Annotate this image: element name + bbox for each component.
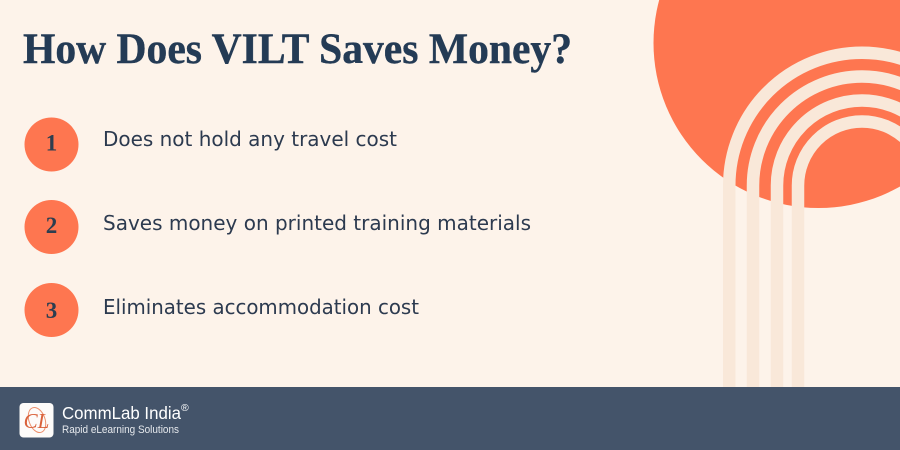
icon: CommLab logo: CL: [24, 409, 49, 433]
decorative sun and arches: [654, 0, 900, 387]
concentric arches: [729, 53, 900, 387]
footer bar: [0, 387, 900, 450]
tagline: Rapid eLearning Solutions: [62, 424, 179, 436]
number badge 1: [24, 118, 78, 172]
brand name: CommLab India: [62, 403, 181, 423]
number badge 3: [24, 283, 78, 337]
item 3 text: Eliminates accommodation cost: [103, 295, 419, 319]
number badge 3: 3: [46, 298, 57, 323]
item 2 text: Saves money on printed training materials: [103, 211, 531, 235]
orange circle: [654, 0, 900, 208]
item 1: [24, 118, 397, 172]
registered mark: ®: [181, 402, 189, 414]
item 1 text: Does not hold any travel cost: [103, 127, 397, 151]
item 3: [24, 283, 419, 337]
number badge 2: 2: [46, 213, 57, 238]
icon: CommLab logo: [20, 403, 54, 438]
number badge 1: 1: [46, 130, 57, 156]
title: How Does VILT Saves Money?: [23, 26, 572, 73]
item 2: [24, 200, 531, 254]
number badge 2: [24, 200, 78, 254]
